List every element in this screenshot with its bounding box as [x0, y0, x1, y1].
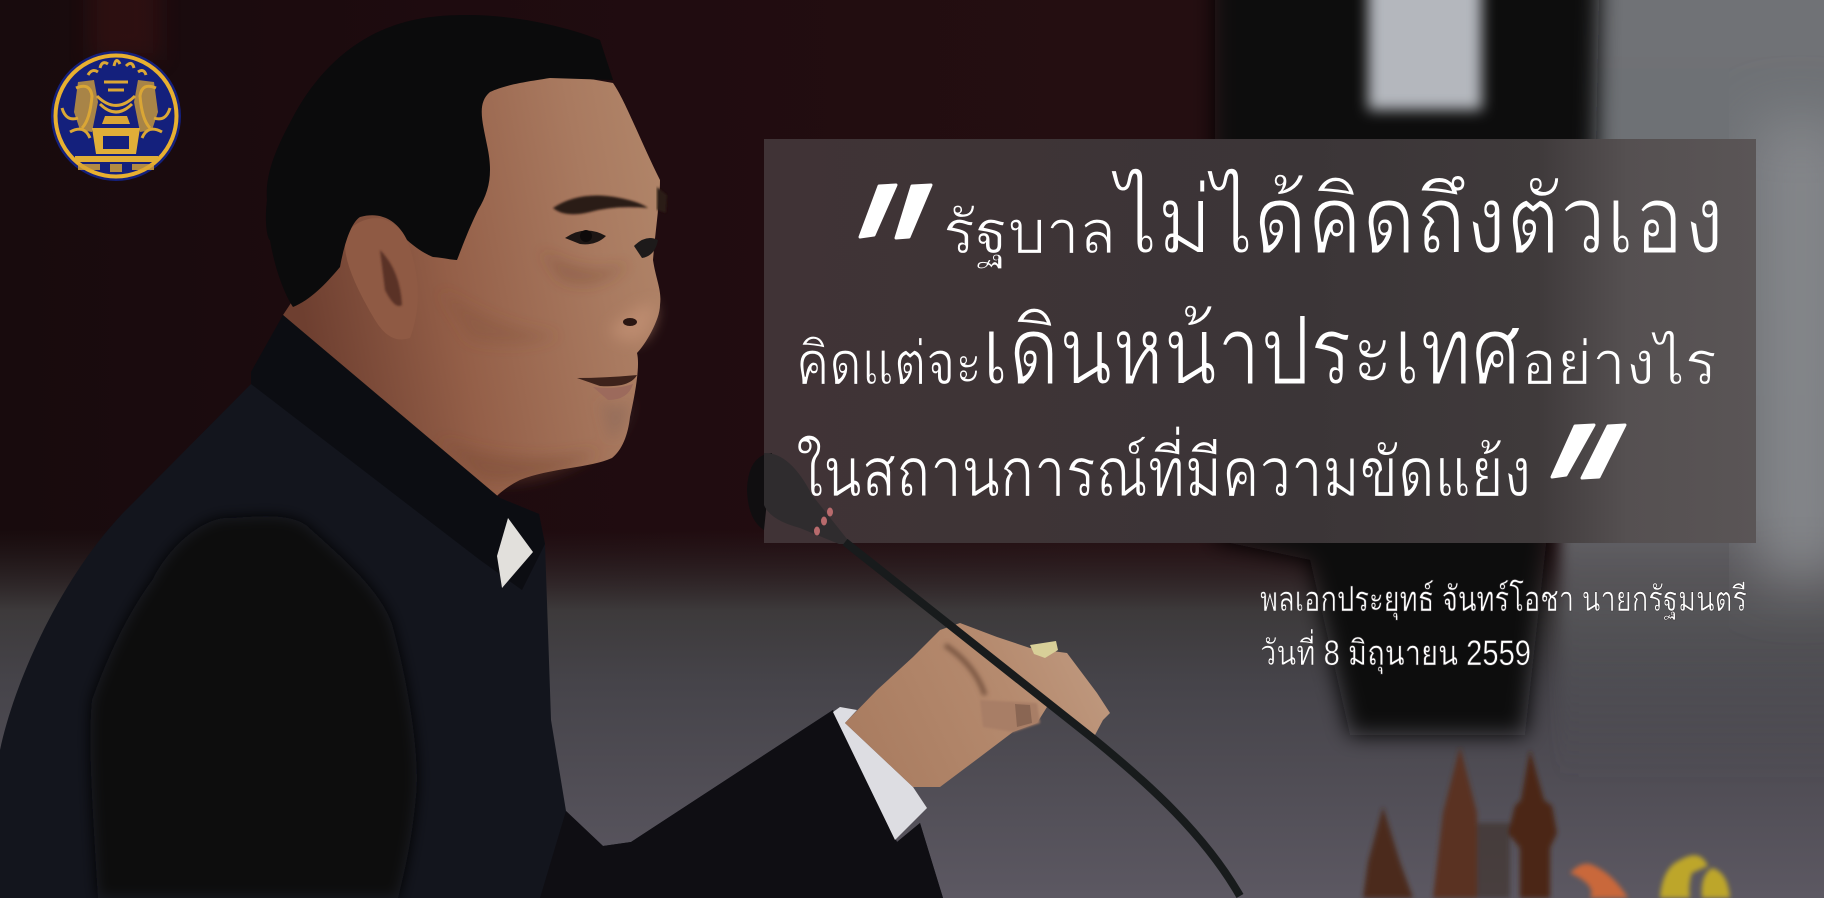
man [0, 15, 1110, 898]
thumb [980, 700, 1040, 732]
microphone [747, 453, 1240, 896]
knuckle fold [945, 645, 985, 695]
face shading [440, 250, 655, 482]
quote line 2 end: อย่างไร [1521, 329, 1717, 397]
quote line 1 start: รัฐบาล [943, 199, 1116, 269]
shirt collar [251, 315, 545, 590]
hair [266, 15, 613, 307]
suit body [0, 315, 943, 898]
attribution date: วันที่ 8 มิถุนายน 2559 [1260, 629, 1531, 674]
closing quotation mark [1552, 425, 1625, 478]
quote panel [764, 139, 1756, 543]
upper arm shadow [90, 516, 417, 898]
icon: government seal [51, 51, 181, 181]
table ornaments: wooden spires and flowers [1363, 747, 1730, 898]
eyebrows and eyes [553, 187, 667, 258]
white shirt collar [497, 518, 533, 588]
shirt cuff [833, 707, 927, 840]
opening quotation mark [860, 185, 931, 238]
hand [845, 623, 1110, 787]
quote line 1 emphasised: ไม่ได้คิดถึงตัวเอง [1110, 168, 1724, 274]
nose and mouth [577, 318, 637, 400]
neck and face [283, 70, 660, 500]
ear [345, 218, 418, 340]
quote line 3: ในสถานการณ์ที่มีความขัดแย้ง [796, 426, 1531, 511]
jacket sleeve edge [540, 710, 943, 898]
ring [1030, 641, 1058, 658]
quote line 2 emphasised: เดินหน้าประเทศ [982, 299, 1521, 405]
quote line 2 start: คิดแต่จะ [796, 330, 982, 397]
